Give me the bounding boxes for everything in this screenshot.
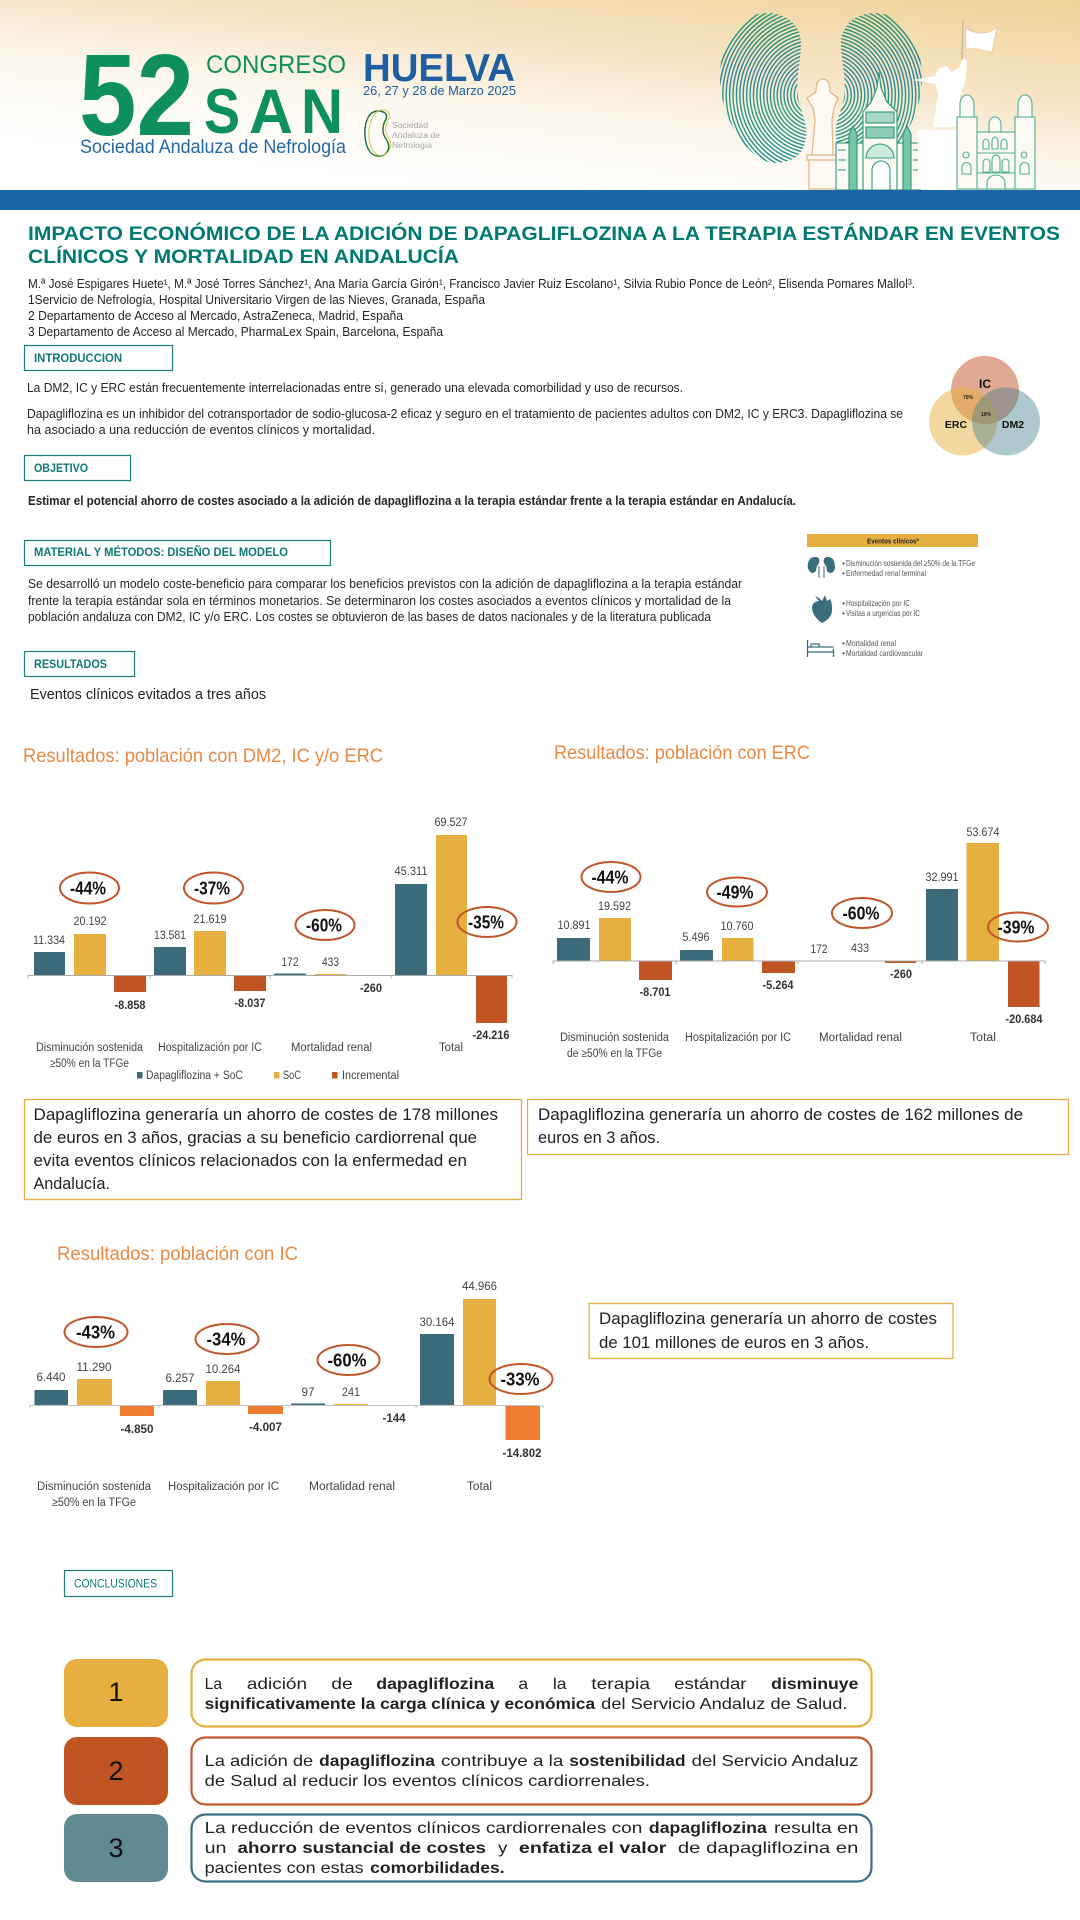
conclusion text 1: a [518, 1676, 528, 1693]
data labels: 97 [302, 1387, 314, 1399]
data labels: 30.164 [420, 1317, 455, 1329]
illustration: church [836, 72, 920, 190]
data labels: -260 [890, 969, 912, 981]
percent callouts [582, 862, 1048, 942]
heading: chart ERC: Resultados: población con ERC [554, 742, 810, 764]
data labels: -8.037 [234, 998, 266, 1010]
venn diagram: DM2 [1002, 419, 1024, 431]
logo: Huelva and dates: HUELVA [363, 47, 515, 90]
text: introduction [27, 381, 903, 437]
list: clinical events: Hospitalización por IC [846, 598, 910, 608]
category labels [37, 1481, 492, 1509]
percent callouts: -37% [194, 878, 230, 898]
section heading: material y métodos [24, 540, 330, 566]
data labels: 11.290 [76, 1362, 112, 1374]
data labels: 10.760 [720, 921, 754, 933]
data labels: -4.007 [249, 1422, 282, 1434]
data labels: -24.216 [472, 1030, 510, 1042]
list: clinical events [842, 558, 975, 658]
conclusion text 2: de Salud al reducir los eventos clínicos cardiorrenales. [205, 1773, 650, 1790]
percent callouts [64, 1317, 552, 1394]
legend: SoC [283, 1070, 301, 1082]
callout: 162 millones: Dapagliflozina generaría un ahorro de costes de 162 millones de [538, 1106, 1023, 1124]
category labels: de ≥50% en la TFGe [567, 1048, 662, 1060]
section heading: resultados [24, 652, 134, 676]
authors and affiliations: 1Servicio de Nefrología, Hospital Universitario Virgen de las Nieves, Granada, España [28, 293, 485, 307]
category labels [560, 1032, 996, 1060]
section heading: conclusiones: CONCLUSIONES [74, 1578, 157, 1590]
section heading: conclusiones [64, 1570, 172, 1596]
conclusion text 3: y [498, 1840, 507, 1857]
title [28, 221, 1060, 268]
category labels: Disminución sostenida [37, 1481, 152, 1493]
text: methods [28, 577, 742, 624]
conclusion text 1: del Servicio Andaluz de Salud. [601, 1696, 848, 1713]
blue band [0, 190, 1080, 210]
data labels: 6.257 [166, 1373, 194, 1385]
category labels: Total [970, 1032, 996, 1044]
conclusion text 2: contribuye a la [441, 1753, 563, 1770]
section heading: introducción: INTRODUCCION [34, 353, 122, 365]
icon: heart [812, 595, 832, 623]
data labels [33, 817, 510, 1042]
text: introduction: ha asociado a una reducción de eventos clínicos y mortalidad. [27, 423, 375, 437]
data labels: 241 [342, 1387, 360, 1399]
list: clinical events: • [842, 558, 845, 568]
callout: 178 millones: Andalucía. [34, 1175, 110, 1193]
list: clinical events: Mortalidad renal [846, 638, 896, 648]
text: objective: Estimar el potencial ahorro de costes asociado a la adición de dapagliflozina a la terapia estándar frente a la terapia estándar en Andalucía. [28, 494, 796, 508]
data labels: 19.592 [598, 901, 631, 913]
venn diagram: 10% [981, 412, 992, 418]
data labels: 6.440 [36, 1372, 66, 1384]
callout: 101 millones: de 101 millones de euros en 3 años. [599, 1334, 869, 1352]
bar chart: DM2, IC y/o ERC [28, 817, 516, 1082]
data labels: 13.581 [154, 930, 186, 942]
data labels: -144 [382, 1413, 406, 1425]
callout: 162 millones [528, 1100, 1068, 1154]
section heading: material y métodos: MATERIAL Y MÉTODOS: DISEÑO DEL MODELO [34, 546, 288, 559]
category labels: Disminución sostenida [560, 1032, 670, 1044]
legend: Dapagliflozina + SoC [146, 1070, 243, 1082]
data labels: -5.264 [762, 980, 794, 992]
data labels: 433 [851, 943, 869, 955]
data labels: -4.850 [120, 1424, 154, 1436]
panel: eventos clínicos: Eventos clínicos* [867, 536, 919, 546]
category labels: Total [467, 1481, 492, 1493]
conclusion text 1 [192, 1660, 872, 1726]
section heading: introducción [24, 346, 172, 370]
conclusion text 2: del Servicio Andaluz [692, 1753, 858, 1770]
callout: 178 millones: Dapagliflozina generaría un ahorro de costes de 178 millones [34, 1106, 498, 1124]
data labels: -8.701 [640, 987, 671, 999]
data labels: 11.334 [33, 935, 66, 947]
text: methods: frente la terapia estándar sola en términos monetarios. Se determinaron los costes asociados a eventos clínicos y mortalidad de la [28, 594, 731, 608]
conclusion text 1: la [553, 1676, 567, 1693]
percent callouts: -60% [306, 914, 342, 936]
conclusion text 2: sostenibilidad [569, 1753, 686, 1770]
percent callouts: -39% [998, 916, 1034, 938]
conclusion text 1: La [205, 1676, 222, 1693]
data labels: 53.674 [966, 827, 1000, 839]
section heading: objetivo: OBJETIVO [34, 463, 88, 475]
data labels: -8.858 [114, 1000, 146, 1012]
percent callouts: -60% [328, 1350, 366, 1370]
list: clinical events: Visitas a urgencias por IC [846, 608, 920, 618]
number badge 2 [64, 1737, 168, 1805]
icon: kidneys [808, 557, 835, 578]
list: clinical events: • [842, 638, 845, 648]
conclusion text 3: enfatiza el valor [519, 1840, 666, 1857]
data labels: 172 [282, 957, 298, 969]
authors and affiliations: 3 Departamento de Acceso al Mercado, PharmaLex Spain, Barcelona, España [28, 325, 443, 339]
icon: kidneys fingerprint [716, 0, 926, 194]
category labels: Mortalidad renal [291, 1042, 372, 1054]
conclusion text 1: de [331, 1676, 353, 1693]
conclusion text 1: adición [247, 1676, 307, 1693]
category labels [36, 1042, 463, 1070]
conclusion 3 [64, 1814, 872, 1882]
data labels: 10.891 [558, 920, 590, 932]
conclusion text 1: significativamente la carga clínica y económica [205, 1696, 595, 1713]
data labels: 20.192 [74, 916, 106, 928]
category labels: Hospitalización por IC [158, 1042, 262, 1054]
logo: Sociedad Andaluza de Nefrología: Nefrología [392, 141, 433, 150]
bar chart: IC [30, 1281, 552, 1509]
callout: 101 millones: Dapagliflozina generaría un ahorro de costes [599, 1310, 937, 1328]
logo: 52 Congreso SAN: S [204, 77, 240, 147]
list: clinical events: Mortalidad cardiovascular [846, 648, 923, 658]
illustration: Columbus monument with flag [913, 20, 997, 189]
list: clinical events: Disminución sostenida del ≥50% de la TFGe [846, 558, 975, 568]
data labels: 69.527 [434, 817, 468, 829]
conclusion text 3: de dapagliflozina en [678, 1840, 858, 1857]
conclusion text 3: La reducción de eventos clínicos cardiorrenales con [205, 1820, 642, 1837]
conclusion text 3: pacientes con estas [205, 1860, 364, 1877]
list: clinical events: • [842, 648, 845, 658]
conclusion text 1: estándar [674, 1676, 747, 1693]
number badge 3: 3 [108, 1833, 124, 1863]
text: introduction: La DM2, IC y ERC están frecuentemente interrelacionadas entre sí, generado una elevada comorbilidad y uso de recursos. [27, 381, 683, 395]
data labels [36, 1281, 542, 1460]
category labels: Mortalidad renal [819, 1032, 902, 1044]
category labels: Mortalidad renal [309, 1481, 395, 1493]
callout: 178 millones [24, 1100, 522, 1200]
logo: Sociedad Andaluza de Nefrología: Andaluza de [392, 131, 441, 140]
header banner [0, 0, 1080, 194]
logo: Sociedad Andaluza de Nefrología: Sociedad [392, 121, 428, 130]
illustration: cathedral [957, 95, 1035, 189]
conclusion text 3: un [205, 1840, 226, 1857]
number badge 3 [64, 1814, 168, 1882]
callout: 178 millones: evita eventos clínicos relacionados con la enfermedad en [34, 1152, 467, 1170]
logo: 52 Congreso SAN: N [301, 77, 343, 147]
panel: eventos clínicos [807, 534, 978, 658]
data labels: 5.496 [682, 932, 710, 944]
conclusion text 2: La adición de [205, 1753, 313, 1770]
section heading: resultados: RESULTADOS [34, 659, 107, 671]
conclusion text 3: dapagliflozina [649, 1820, 767, 1837]
percent callouts: -44% [70, 878, 106, 898]
heading: chart DM2, IC y/o ERC: Resultados: población con DM2, IC y/o ERC [23, 745, 383, 767]
percent callouts: -35% [468, 912, 504, 932]
logo: 52 Congreso SAN: A [249, 77, 293, 147]
list: clinical events: • [842, 568, 845, 578]
number badge 2: 2 [108, 1756, 124, 1786]
data labels: 10.264 [206, 1364, 241, 1376]
data labels: 45.311 [394, 866, 428, 878]
conclusion text 2: dapagliflozina [319, 1753, 435, 1770]
list: clinical events: • [842, 598, 845, 608]
category labels: Hospitalización por IC [168, 1481, 279, 1493]
category labels: Hospitalización por IC [685, 1032, 791, 1044]
conclusion 2 [64, 1737, 872, 1805]
category labels: ≥50% en la TFGe [52, 1497, 136, 1509]
legend: Incremental [342, 1070, 399, 1082]
data labels: 21.619 [194, 914, 226, 926]
conclusion text 1: terapia [591, 1676, 650, 1693]
data labels: -260 [360, 983, 382, 995]
data labels: 32.991 [926, 872, 958, 884]
title: CLÍNICOS Y MORTALIDAD EN ANDALUCÍA [28, 245, 459, 268]
conclusion text 3: comorbilidades. [370, 1860, 505, 1877]
data labels: -14.802 [502, 1448, 542, 1460]
data labels: 44.966 [462, 1281, 497, 1293]
percent callouts [60, 872, 516, 940]
heading: chart IC: Resultados: población con IC [57, 1243, 298, 1265]
category labels: Disminución sostenida [36, 1042, 144, 1054]
callout: 178 millones: de euros en 3 años, gracias a su beneficio cardiorrenal que [34, 1129, 477, 1147]
conclusion text 3: ahorro sustancial de costes [238, 1840, 486, 1857]
category labels: ≥50% en la TFGe [50, 1058, 129, 1070]
percent callouts: -60% [842, 902, 880, 924]
percent callouts: -44% [592, 866, 628, 888]
subheading: eventos evitados: Eventos clínicos evitados a tres años [30, 686, 266, 703]
text: methods: población andaluza con DM2, IC y/o ERC. Los costes se obtuvieron de las bases de datos nacionales y de la literatura publicada [28, 610, 711, 624]
conclusion text 2 [192, 1738, 872, 1804]
data labels: 433 [322, 957, 339, 969]
logo: 52 Congreso SAN [79, 30, 346, 160]
authors and affiliations [28, 277, 915, 339]
list: clinical events: Enfermedad renal terminal [846, 568, 926, 578]
logo: Sociedad Andaluza de Nefrología [365, 110, 441, 156]
bar chart: ERC [553, 827, 1048, 1060]
number badge 1: 1 [108, 1677, 124, 1707]
logo: 52 Congreso SAN: Sociedad Andaluza de Nefrología [80, 137, 346, 158]
authors and affiliations: M.ª José Espigares Huete¹, M.ª José Torres Sánchez¹, Ana María García Girón¹, Francisco Javier Ruiz Escolano¹, Silvia Rubio Ponce de León², Elisenda Pomares Mallol³. [28, 277, 915, 291]
number badge 1 [64, 1659, 168, 1727]
logo: 52 Congreso SAN: CONGRESO [206, 51, 346, 79]
percent callouts: -34% [206, 1328, 246, 1350]
percent callouts: -33% [500, 1368, 540, 1390]
callout: 101 millones [589, 1304, 953, 1358]
logo: Huelva and dates: 26, 27 y 28 de Marzo 2025 [363, 83, 516, 98]
percent callouts: -43% [76, 1322, 115, 1342]
text: introduction: Dapagliflozina es un inhibidor del cotransportador de sodio-glucosa-2 eficaz y seguro en el tratamiento de pacientes adultos con DM2, IC y ERC3. Dapagliflozina se [27, 407, 903, 421]
callout: 162 millones: euros en 3 años. [538, 1129, 660, 1147]
venn diagram [929, 356, 1040, 456]
conclusion text 3: resulta en [774, 1820, 858, 1837]
logo: 52 Congreso SAN: 52 [79, 30, 194, 160]
venn diagram: 70% [963, 395, 974, 401]
data labels: -20.684 [1006, 1014, 1043, 1026]
data labels: 172 [810, 944, 828, 956]
category labels: Total [439, 1042, 463, 1054]
text: methods: Se desarrolló un modelo coste-beneficio para comparar los beneficios previstos con la adición de dapagliflozina a la terapia estándar [28, 577, 742, 591]
list: clinical events: • [842, 608, 845, 618]
data labels [558, 827, 1043, 1026]
authors and affiliations: 2 Departamento de Acceso al Mercado, AstraZeneca, Madrid, España [28, 309, 403, 323]
conclusion text 3 [192, 1814, 872, 1882]
conclusion text 1: disminuye [771, 1676, 859, 1693]
percent callouts: -49% [716, 882, 754, 902]
conclusion 1 [64, 1659, 872, 1727]
venn diagram: ERC [945, 419, 968, 431]
conclusion text 1: dapagliflozina [376, 1676, 494, 1693]
title: IMPACTO ECONÓMICO DE LA ADICIÓN DE DAPAGLIFLOZINA A LA TERAPIA ESTÁNDAR EN EVENTOS [28, 221, 1060, 245]
legend [137, 1070, 399, 1082]
venn diagram: IC [979, 377, 991, 391]
icon: bed [808, 640, 834, 657]
section heading: objetivo [24, 456, 130, 480]
illustration: statue [807, 79, 838, 189]
